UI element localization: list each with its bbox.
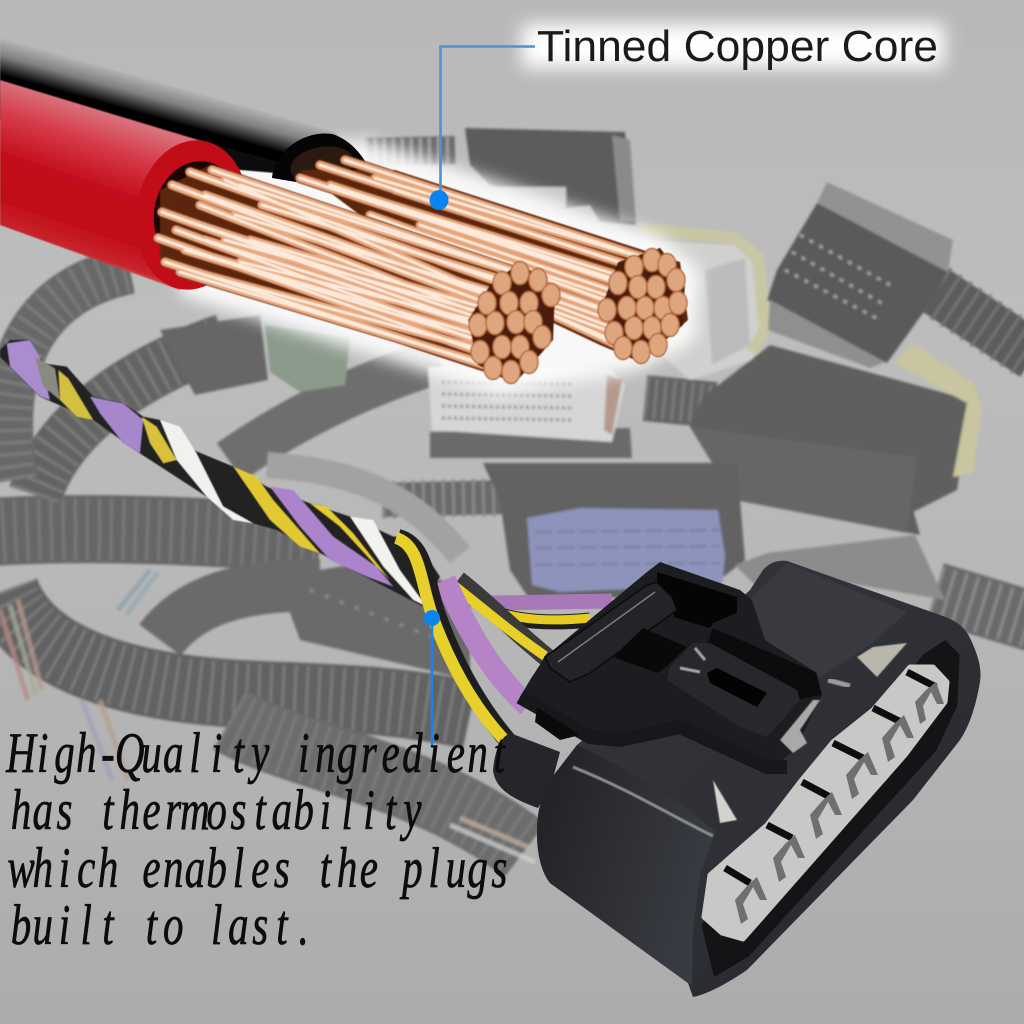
glow behind cable bbox=[170, 140, 700, 395]
description text: High-Quality ingredient bbox=[5, 722, 506, 785]
plug: lower ridge bbox=[520, 697, 787, 767]
connector: green bbox=[265, 325, 350, 392]
strand tips: front bbox=[468, 262, 555, 383]
connector: grey far right bbox=[735, 535, 945, 600]
ghosted wire harness background bbox=[0, 128, 1024, 862]
description text: which enables the plugs bbox=[7, 837, 507, 900]
leader line and dot bbox=[424, 610, 440, 747]
plug: rear stub bbox=[493, 733, 560, 808]
plug: terminal slots bbox=[725, 672, 936, 883]
label glow bbox=[522, 24, 944, 68]
plug: lock window bbox=[667, 643, 800, 737]
copper strand bundle: front bbox=[158, 165, 560, 384]
description text: built to last. bbox=[11, 894, 309, 957]
plug: front shell bbox=[537, 745, 715, 985]
wire base bbox=[0, 340, 440, 607]
connector: blue bbox=[483, 463, 745, 600]
cable: red jacket bbox=[0, 80, 205, 290]
leader line bbox=[440, 46, 535, 200]
connector: black centre bbox=[690, 345, 970, 535]
connector: beige right bbox=[640, 240, 767, 380]
plug: ridge band bbox=[705, 628, 822, 700]
cable: black jacket end bbox=[272, 133, 373, 188]
connector: large black right bbox=[767, 203, 948, 363]
strand tips: rear bbox=[604, 248, 685, 362]
plug: latch cavity bbox=[657, 572, 737, 628]
connector: white centre bbox=[430, 428, 632, 458]
plug: main shell bbox=[537, 561, 981, 997]
description text: has thermostability bbox=[11, 779, 422, 842]
twisted signal wire bbox=[0, 340, 440, 607]
plug: highlights bbox=[857, 643, 907, 677]
callout label: Tinned Copper Core bbox=[537, 22, 938, 71]
coloured loose wires bbox=[0, 570, 535, 862]
connector plug bbox=[493, 561, 981, 997]
plug: grey terminal insert bbox=[704, 667, 947, 939]
plug: terminal notches bbox=[735, 682, 944, 924]
twist colours bbox=[7, 340, 427, 607]
copper strand bundle: rear bbox=[300, 160, 688, 364]
separate wires into connector bbox=[396, 538, 612, 748]
plug: upper shell face bbox=[713, 563, 907, 677]
connector: left grey bbox=[277, 560, 470, 680]
callout: tinned copper core bbox=[430, 22, 944, 210]
cable: black jacket bbox=[0, 38, 372, 180]
description text bbox=[5, 722, 507, 957]
plug: latch block bbox=[545, 582, 677, 682]
plug: glossy square bbox=[613, 628, 687, 673]
callout: quality description bbox=[5, 610, 507, 957]
cable: red jacket end bbox=[126, 133, 258, 297]
leader dot bbox=[430, 190, 448, 210]
corrugated conduit tubes bbox=[0, 150, 1024, 850]
plug: latch backing bbox=[520, 562, 822, 770]
plug: opening bbox=[703, 642, 958, 975]
connector: top bbox=[465, 128, 636, 225]
